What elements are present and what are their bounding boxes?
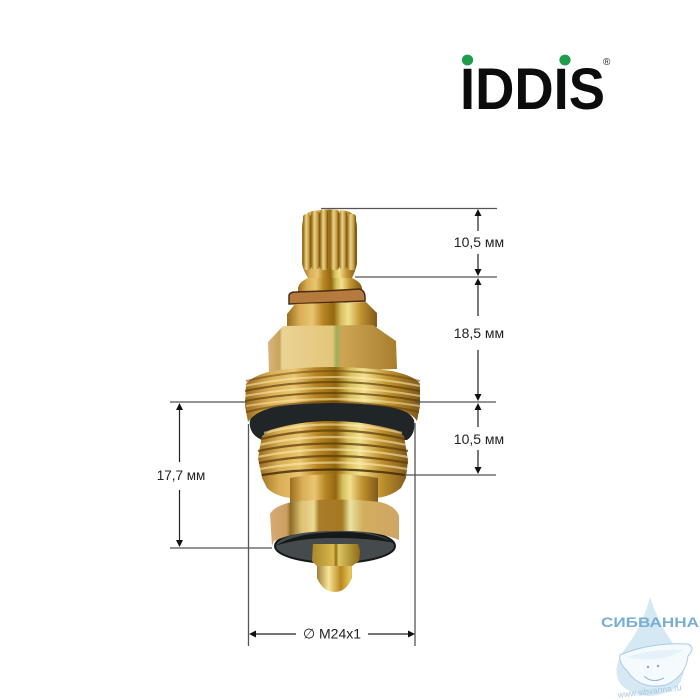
dimension: 18,5 мм: 18,5 мм [454, 325, 504, 341]
watermark: Sibvanna [601, 597, 699, 700]
small nut [287, 302, 377, 327]
seal rim shadow [275, 532, 395, 546]
dimension: 10,5 мм top: 10,5 мм [454, 234, 504, 250]
logo: IDDIS [460, 55, 611, 122]
brass head [270, 500, 399, 546]
tip [312, 544, 360, 592]
dimension: 18,5 мм [454, 278, 504, 401]
dimension: 10,5 мм lower [454, 403, 504, 474]
black o-ring [250, 399, 414, 440]
dimension: 17,7 мм [157, 403, 205, 547]
black seal disc [275, 529, 395, 563]
dimension: M24x1 [249, 626, 415, 642]
lower thread [258, 421, 408, 498]
hex nut [268, 325, 397, 373]
logo wordmark: IDDIS [460, 57, 605, 122]
upper thread [245, 367, 420, 422]
collar under stem [298, 278, 362, 296]
splined stem [302, 210, 357, 278]
watermark drop [616, 597, 684, 696]
logo green dot left [462, 55, 473, 65]
product: brass faucet cartridge [245, 210, 420, 592]
watermark name: СИБВАННА [601, 614, 699, 630]
dimension: 10,5 мм top [454, 209, 504, 276]
logo green dot right [559, 55, 571, 65]
dimension: 17,7 мм: 17,7 мм [157, 468, 205, 483]
watermark url: www.sibvanna.ru [616, 682, 682, 700]
dimension: M24x1: ∅ M24x1 [303, 626, 361, 642]
watermark bath [620, 644, 692, 686]
dimension: 10,5 мм lower: 10,5 мм [454, 431, 504, 447]
logo registered mark: ® [603, 57, 611, 68]
copper washer [289, 289, 365, 304]
dimension lines [170, 208, 497, 646]
inner shaft [290, 474, 378, 506]
